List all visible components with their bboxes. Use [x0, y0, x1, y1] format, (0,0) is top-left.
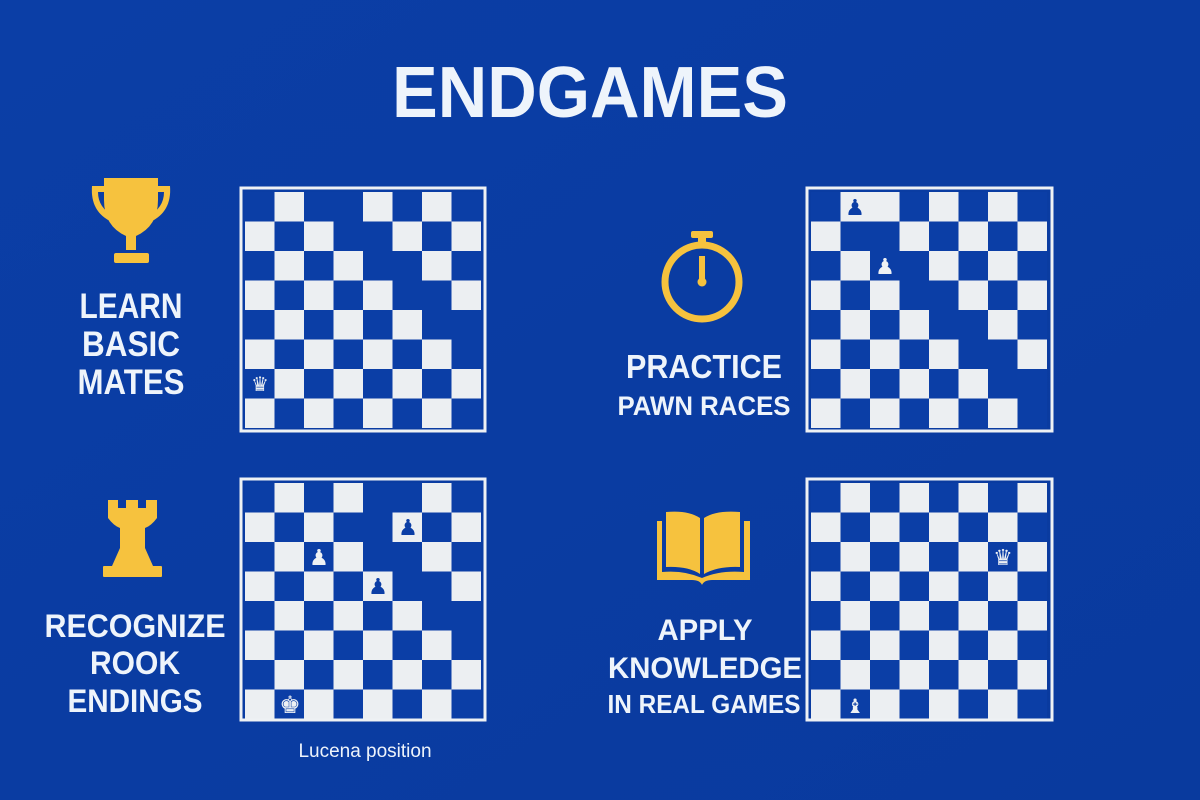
text: practice pawn races — [618, 348, 790, 421]
text: learn basic mates — [78, 287, 184, 402]
icon: stopwatch — [665, 231, 739, 319]
icon: rook — [103, 500, 162, 577]
text: learn basic mates: BASIC — [82, 325, 180, 364]
board: bottom-left — [241, 479, 485, 720]
board: top-right: ♟ — [875, 255, 895, 280]
text: apply knowledge in real games: IN REAL GAMES — [608, 689, 800, 719]
text: apply knowledge in real games: KNOWLEDGE — [608, 652, 802, 685]
caption: lucena position: Lucena position — [298, 741, 432, 762]
text: apply knowledge in real games: APPLY — [658, 614, 752, 647]
text: learn basic mates: LEARN — [80, 287, 182, 326]
board: bottom-right: ♛ — [993, 546, 1013, 571]
board: bottom-left: ♟ — [368, 575, 388, 600]
board: bottom-left: ♚ — [279, 691, 301, 719]
text: recognize rook endings: ENDINGS — [68, 683, 202, 719]
board: bottom-right: ♝ — [846, 694, 864, 718]
board: top-left — [241, 188, 485, 431]
title: ENDGAMES — [392, 53, 788, 133]
text: recognize rook endings — [44, 608, 226, 719]
text: practice pawn races: PAWN RACES — [618, 391, 790, 421]
text: apply knowledge in real games — [608, 614, 802, 719]
text: practice pawn races: PRACTICE — [626, 348, 782, 385]
board: top-right — [807, 188, 1052, 431]
text: recognize rook endings: RECOGNIZE — [44, 608, 226, 644]
board: bottom-left: ♟ — [309, 546, 329, 571]
board: top-right: ♟ — [845, 196, 865, 221]
text: learn basic mates: MATES — [78, 363, 184, 402]
board: bottom-right — [807, 479, 1052, 720]
board: top-left: ♛ — [251, 372, 269, 396]
icon: book — [657, 512, 750, 585]
icon: trophy — [92, 178, 170, 263]
text: recognize rook endings: ROOK — [90, 645, 180, 681]
board: bottom-left: ♟ — [398, 516, 418, 541]
